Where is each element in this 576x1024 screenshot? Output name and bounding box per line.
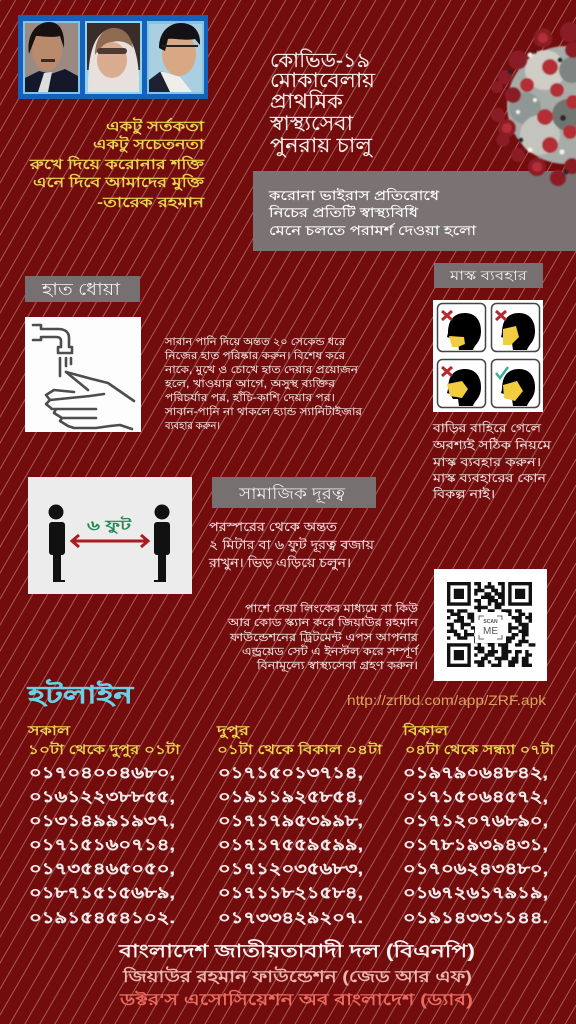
hotline column: morning: সকাল bbox=[27, 723, 72, 738]
scan me badge bbox=[475, 612, 506, 643]
hotline column: morning: ০১৭০৪০০৪৬৮০, bbox=[29, 765, 175, 782]
hotline column: afternoon: ০১৬৭২৬১৭৯১৯, bbox=[403, 885, 548, 902]
hotline column: morning: ০১৮৭১৫১৫৬৮৯, bbox=[29, 885, 175, 902]
hotline column: noon: ০১৭১১৮২১৫৮৪, bbox=[218, 885, 363, 902]
hotline column: morning: ০১৭১৫১৬০৭১৪, bbox=[29, 837, 175, 854]
text: social distance advice: ২ মিটার বা ৬ ফুট দূরত্ব বজায় bbox=[209, 537, 375, 553]
footer: organisations: বাংলাদেশ জাতীয়তাবাদী দল (বিএনপি) bbox=[118, 939, 475, 961]
title: মোকাবেলায় bbox=[270, 70, 376, 92]
heading: social distance bbox=[212, 477, 376, 508]
hotline column: morning: ১০টা থেকে দুপুর ০১টা bbox=[28, 741, 182, 759]
photo: woman in white scarf bbox=[85, 21, 142, 94]
photo: man in suit bbox=[23, 21, 80, 94]
text: mask advice bbox=[432, 421, 551, 501]
text: hand washing advice: ব্যবহার করুন। bbox=[164, 420, 220, 432]
hotline column: afternoon: ০১৯১৪৩৩১১৪৪. bbox=[403, 910, 548, 927]
text: hand washing advice: হলে, খাওয়ার আগে, অসুস্থ ব্যক্তির bbox=[164, 377, 336, 390]
gray advisory panel bbox=[253, 171, 576, 251]
heading: hand washing: হাত ধোয়া bbox=[41, 280, 121, 299]
heading: hand washing bbox=[25, 276, 140, 302]
hotline column: morning: ০১৭৩৫৪৬৫০৫০, bbox=[29, 861, 175, 878]
right and wrong mask positions bbox=[438, 304, 540, 408]
hotline column: morning bbox=[27, 723, 182, 927]
footer: organisations: ডক্টর'স এসোসিয়েশন অব বাংলাদেশ (ড্যাব) bbox=[119, 989, 473, 1009]
hotline column: afternoon: ০১৭১২০৭৬৮৯০, bbox=[403, 813, 548, 830]
coronavirus illustration bbox=[491, 22, 576, 186]
person right bbox=[154, 504, 170, 582]
text: hand washing advice: পরিচর্যার পর, হাঁচি-কাশি দেয়ার পর। bbox=[165, 390, 335, 404]
hotline column: noon: দুপুর bbox=[216, 723, 250, 740]
hotline column: afternoon: ০৪টা থেকে সন্ধ্যা ০৭টা bbox=[405, 741, 556, 757]
hotline column: afternoon: ০১৯৭৯০৬৪৮৪২, bbox=[403, 765, 548, 782]
quote by Tarique Rahman: -তারেক রহমান bbox=[97, 194, 205, 210]
footer: organisations bbox=[118, 939, 475, 1009]
text: social distance advice bbox=[208, 520, 375, 571]
text: app instructions: পাশে দেয়া লিংকের মাধ্যমে বা কিউ bbox=[245, 602, 418, 615]
hotline column: noon: ০১৭১৭৯৫৩৯৯৮, bbox=[218, 813, 363, 830]
photo frame: three leaders bbox=[18, 15, 208, 99]
double arrow bbox=[72, 535, 148, 547]
heading: hotline: হটলাইন bbox=[27, 679, 135, 709]
gray advisory panel: নিচের প্রতিটি স্বাস্থ্যবিধি bbox=[268, 205, 419, 220]
hotline column: afternoon: ০১৭০৬২৪৩৪৮০, bbox=[403, 861, 548, 878]
hotline column: afternoon bbox=[402, 722, 556, 927]
text: mask advice: মাস্ক ব্যবহারের কোন bbox=[432, 471, 547, 485]
gray advisory panel: মেনে চলতে পরামর্শ দেওয়া হলো bbox=[269, 223, 476, 238]
quote by Tarique Rahman: একটু সচেতনতা bbox=[93, 135, 205, 153]
hotline column: noon: ০১৭৩৩৪২৯২০৭. bbox=[218, 910, 363, 927]
title: স্বাস্থ্যসেবা bbox=[269, 113, 354, 135]
title: কোভিড-১৯ bbox=[270, 49, 370, 72]
hotline column: noon: ০১৭১৭৫৫৯৫৯৯, bbox=[218, 837, 363, 854]
hotline column: noon: ০১৭১৫০১৩৭১৪, bbox=[218, 765, 363, 782]
hotline column: afternoon: ০১৭৮১৯৩৯৪৩১, bbox=[403, 837, 548, 854]
text: hand washing advice: সাবান-পানি না থাকলে হ্যান্ড স্যানিটাইজার bbox=[164, 405, 363, 418]
heading: mask use bbox=[434, 263, 543, 288]
hotline column: afternoon: ০১৭১৫০৬৪৫৭২, bbox=[403, 789, 548, 806]
scan me badge: ME bbox=[483, 626, 498, 637]
text: app instructions: বিনামূল্যে স্বাস্থ্যসেবা গ্রহণ করুন। bbox=[256, 659, 418, 672]
quote by Tarique Rahman: একটু সর্তকতা bbox=[106, 117, 205, 135]
person left bbox=[48, 504, 65, 582]
hotline column: noon: ০১৯১১৯২৫৮৫৪, bbox=[218, 789, 363, 806]
text: hand washing advice: নিজের হাত পরিষ্কার করুন। বিশেষ করে bbox=[164, 349, 346, 362]
heading: mask use: মাস্ক ব্যবহার bbox=[449, 268, 528, 283]
text: social distance advice: রাখুন। ভিড় এড়িয়ে চলুন। bbox=[208, 555, 351, 571]
text: mask advice: বিকল্প নাই। bbox=[432, 487, 495, 501]
title: পুনরায় চালু bbox=[270, 135, 373, 157]
quote by Tarique Rahman: এনে দিবে আমাদের মুক্তি bbox=[33, 173, 206, 191]
icon: six feet distance: ৬ ফুট bbox=[87, 516, 133, 535]
text: social distance advice: পরস্পরের থেকে অন্তত bbox=[209, 520, 338, 534]
heading: social distance: সামাজিক দূরত্ব bbox=[238, 484, 346, 504]
text: hand washing advice: নাকে, মুখে ও চোখে হাত দেয়ার প্রয়োজন bbox=[164, 364, 359, 376]
text: mask advice: বাড়ির বাহিরে গেলে bbox=[432, 421, 542, 435]
title: প্রাথমিক bbox=[270, 90, 344, 113]
scan me badge: SCAN bbox=[483, 619, 498, 625]
title bbox=[269, 49, 376, 157]
hotline column: noon bbox=[216, 723, 384, 927]
text: mask advice: মাস্ক ব্যবহার করুন। bbox=[432, 455, 541, 469]
hotline column: afternoon: বিকাল bbox=[402, 722, 450, 738]
footer: organisations: জিয়াউর রহমান ফাউন্ডেশন (জেড আর এফ) bbox=[122, 966, 472, 986]
quote by Tarique Rahman: রুখে দিয়ে করোনার শক্তি bbox=[29, 155, 206, 172]
text: app instructions: ফাউন্ডেশনের ট্রিটমেন্ট এপস আপনার bbox=[229, 631, 419, 644]
hotline column: morning: ০১৩১৪৯৯১৯৩৭, bbox=[29, 813, 175, 830]
text: hand washing advice bbox=[164, 335, 363, 432]
QR code bbox=[434, 569, 547, 681]
icon: mask usage grid bbox=[433, 300, 543, 412]
text: app instructions: এন্ড্রয়েড সেট এ ইনস্টল করে সম্পূর্ণ bbox=[242, 645, 420, 658]
hotline column: morning: ০১৬১২২৩৮৮৫৫, bbox=[29, 789, 175, 806]
icon: hand washing bbox=[25, 317, 141, 432]
text: mask advice: অবশ্যই সঠিক নিয়মে bbox=[432, 438, 551, 452]
hotline column: noon: ০১টা থেকে বিকাল ০৪টা bbox=[217, 741, 384, 757]
text: app instructions: আর কোড স্ক্যান করে জিয়াউর রহমান bbox=[227, 616, 418, 629]
hotline column: noon: ০১৭১২০৩৫৬৮৩, bbox=[218, 861, 363, 878]
icon: six feet distance bbox=[28, 477, 192, 594]
app link: http://zrfbd.com/app/ZRF.apk bbox=[347, 692, 547, 708]
gray advisory panel: করোনা ভাইরাস প্রতিরোধে bbox=[268, 188, 440, 203]
quote by Tarique Rahman bbox=[29, 117, 206, 210]
text: app instructions bbox=[227, 602, 420, 672]
text: hand washing advice: সাবান পানি দিয়ে অন্তত ২০ সেকেন্ড ধরে bbox=[164, 335, 346, 348]
photo: man with glasses bbox=[147, 21, 204, 94]
hotline column: morning: ০১৯১৫৪৫৪১০২. bbox=[29, 910, 175, 927]
